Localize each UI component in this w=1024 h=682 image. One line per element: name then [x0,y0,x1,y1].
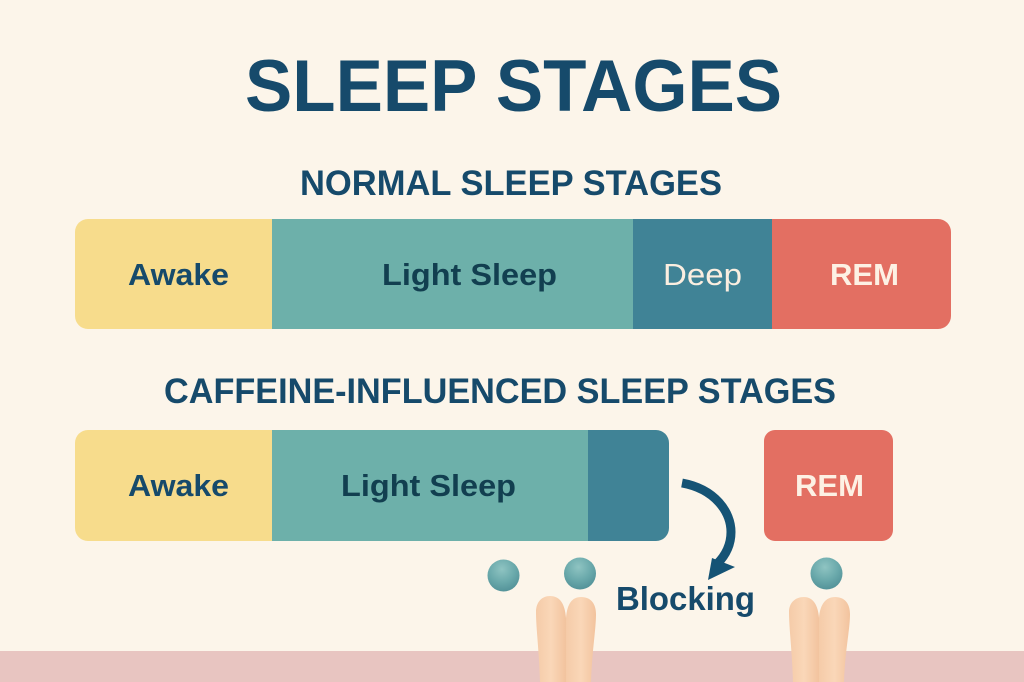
heading: normal sleep stages: NORMAL SLEEP STAGES [300,164,722,203]
fingers: left pair [536,596,596,682]
arrow: blocking [682,483,735,580]
label: awake: Awake [128,257,229,292]
bar: normal sleep stages [75,219,951,329]
block: REM displaced: REM [795,468,864,503]
label: light sleep: Light Sleep [382,257,557,292]
molecule: right [810,558,842,590]
label: deep: Deep [663,257,742,292]
label: REM: REM [830,257,899,292]
label: light sleep: Light Sleep [341,468,516,503]
label: awake: Awake [128,468,229,503]
bar: caffeine-influenced sleep stages [75,430,669,541]
pink base strip [0,651,1024,682]
block: REM displaced [764,430,893,541]
label: blocking: Blocking [616,580,755,617]
heading: caffeine-influenced sleep stages: CAFFEINE-INFLUENCED SLEEP STAGES [164,372,836,411]
molecule: left [488,560,520,592]
fingers: right pair [789,597,850,682]
molecule: middle [564,558,596,590]
title: SLEEP STAGES [245,46,782,127]
